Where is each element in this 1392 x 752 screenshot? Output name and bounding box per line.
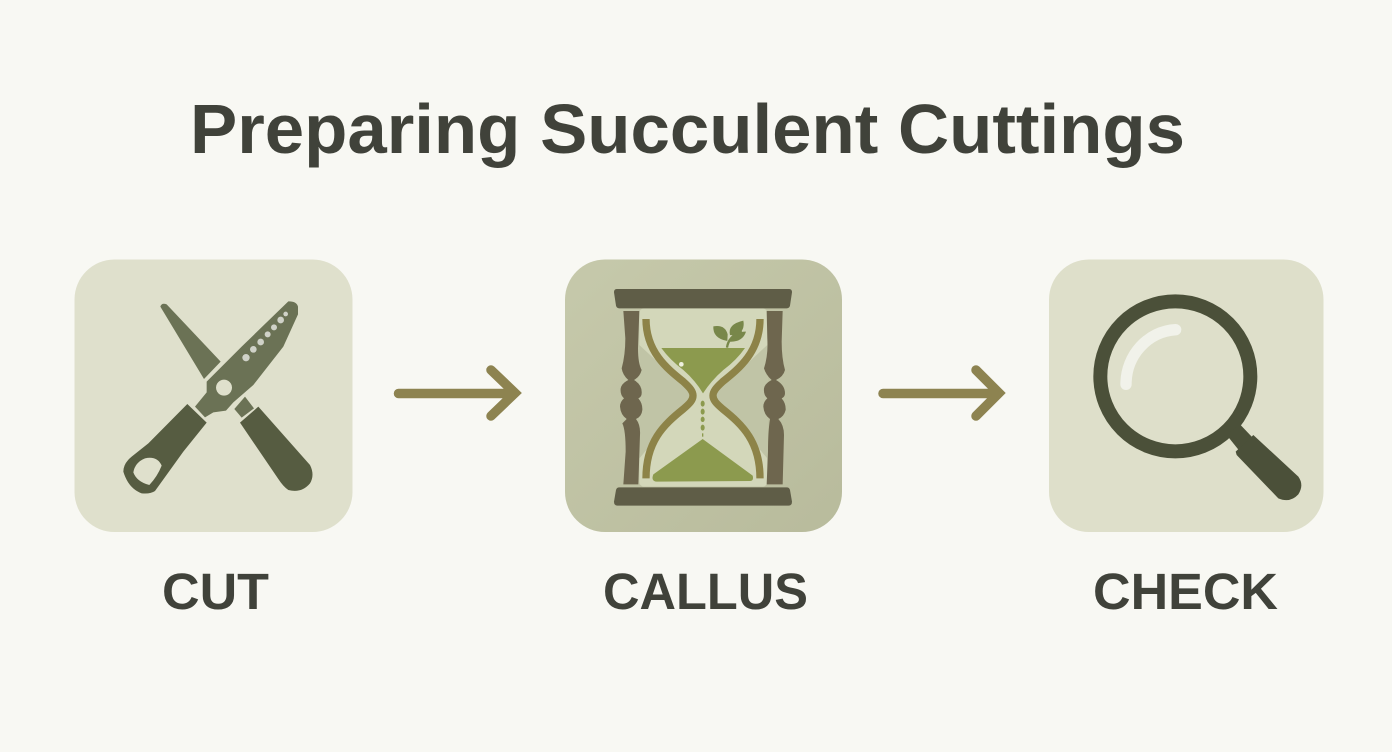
icon: magnifying glass (1100, 301, 1301, 500)
left column (620, 311, 642, 484)
right column (763, 311, 786, 484)
serration dots (242, 312, 288, 361)
sprout (713, 321, 746, 348)
lens highlight (1126, 330, 1176, 384)
arrow: cut to callus (398, 370, 515, 416)
pin stub (234, 397, 254, 418)
right handle (240, 407, 312, 491)
panel: check (1049, 260, 1324, 532)
handle grip (1236, 435, 1301, 500)
left handle (123, 404, 207, 494)
sand grain (679, 362, 684, 367)
top frame (614, 289, 792, 308)
label: callus: CALLUS (603, 563, 808, 620)
arrow: callus to check (883, 370, 999, 416)
icon: hourglass (614, 289, 792, 506)
glass outline (646, 319, 693, 478)
lower sand (653, 439, 753, 482)
panel: callus (565, 260, 842, 532)
label: check: CHECK (1093, 563, 1278, 620)
upper sand (661, 348, 745, 393)
glass (639, 308, 767, 487)
bottom frame (614, 487, 792, 506)
card: check background (1049, 260, 1324, 532)
handle neck (1227, 424, 1253, 452)
left blade (160, 304, 221, 379)
lens ring (1100, 301, 1250, 451)
right blade with pivot (195, 301, 298, 417)
label: cut: CUT (162, 563, 269, 620)
icon: scissors (123, 301, 312, 494)
falling sand (701, 401, 705, 437)
title: Preparing Succulent Cuttings (190, 90, 1185, 168)
card: callus background (565, 260, 842, 532)
card: cut background (74, 260, 352, 532)
panel: cut (74, 260, 352, 532)
